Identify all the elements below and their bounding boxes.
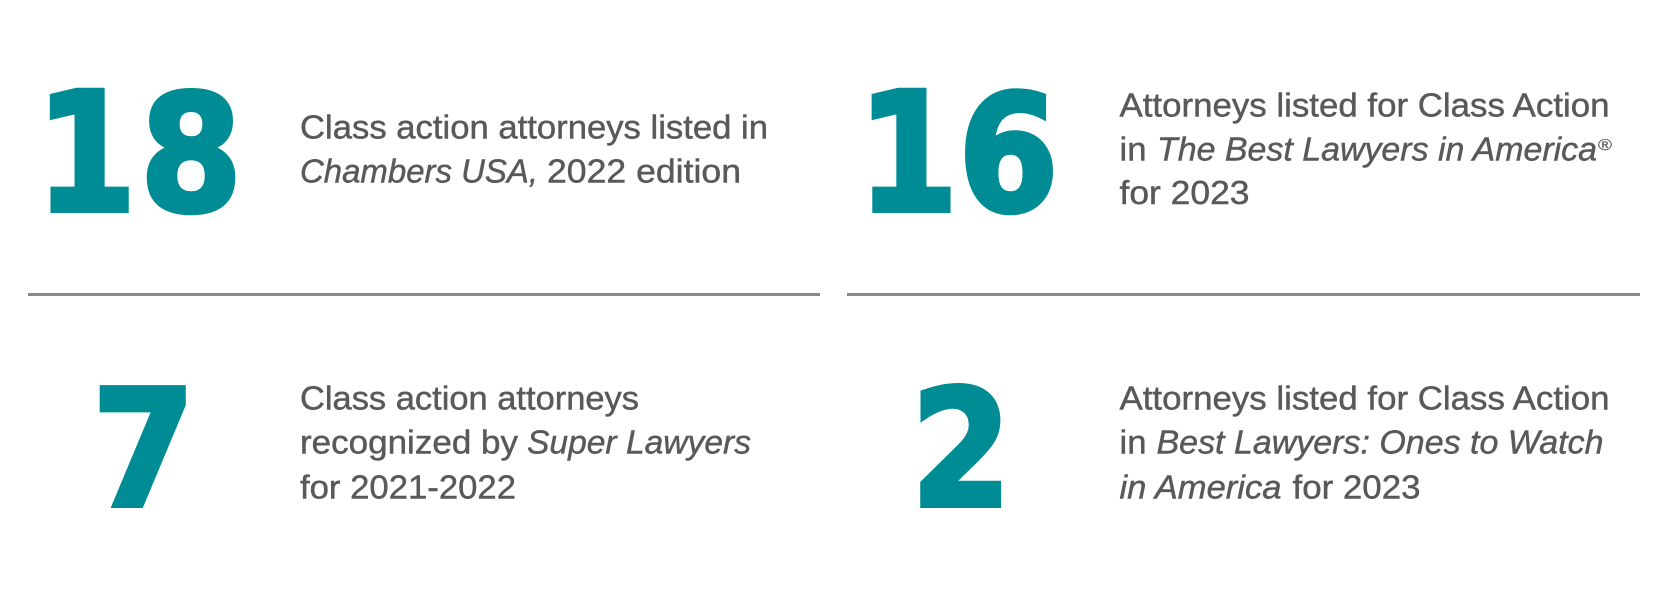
- text: The Best Lawyers description: The Best Lawyers in America: [1157, 130, 1597, 168]
- number 2: 2: [911, 357, 1011, 545]
- panel: The Best Lawyers stat: [858, 57, 1612, 250]
- panel: Ones to Watch stat: [911, 357, 1610, 545]
- text: The Best Lawyers description: [1120, 86, 1612, 211]
- number 18: [36, 57, 242, 250]
- text: Ones to Watch description: in America: [1120, 468, 1282, 506]
- text: Ones to Watch description: Best Lawyers: Ones to Watch: [1156, 424, 1604, 460]
- text: The Best Lawyers description: in: [1120, 130, 1146, 168]
- text: Super Lawyers description: Class action attorneys: [300, 380, 639, 416]
- text: Chambers USA description: Class action attorneys listed in: [300, 108, 768, 146]
- text: Super Lawyers description: [300, 380, 751, 506]
- text: Super Lawyers description: recognized by: [300, 424, 519, 460]
- number 18: 8: [140, 62, 242, 249]
- number 7: 7: [92, 356, 195, 544]
- number 18: 1: [36, 57, 137, 250]
- number 16: 1: [858, 57, 958, 250]
- text: Ones to Watch description: Attorneys listed for Class Action: [1120, 380, 1610, 416]
- text: The Best Lawyers description: Attorneys listed for Class Action: [1120, 86, 1610, 124]
- text: Ones to Watch description: [1120, 380, 1610, 506]
- panel: Chambers USA stat: [36, 57, 768, 250]
- text: Super Lawyers description: Super Lawyers: [527, 424, 751, 460]
- text: Super Lawyers description: for 2021-2022: [300, 468, 516, 506]
- panel: Super Lawyers stat: [92, 356, 751, 544]
- number 16: [858, 57, 1059, 250]
- text: The Best Lawyers description: ®: [1598, 137, 1612, 154]
- divider: left: [28, 293, 820, 296]
- text: The Best Lawyers description: for 2023: [1120, 174, 1250, 211]
- text: Chambers USA description: Chambers USA,: [300, 152, 538, 190]
- text: Ones to Watch description: for 2023: [1292, 468, 1420, 506]
- text: Chambers USA description: [300, 108, 768, 190]
- text: Chambers USA description: 2022 edition: [547, 152, 741, 190]
- text: Ones to Watch description: in: [1120, 424, 1146, 460]
- divider: right: [847, 293, 1640, 296]
- number 16: 6: [958, 62, 1059, 250]
